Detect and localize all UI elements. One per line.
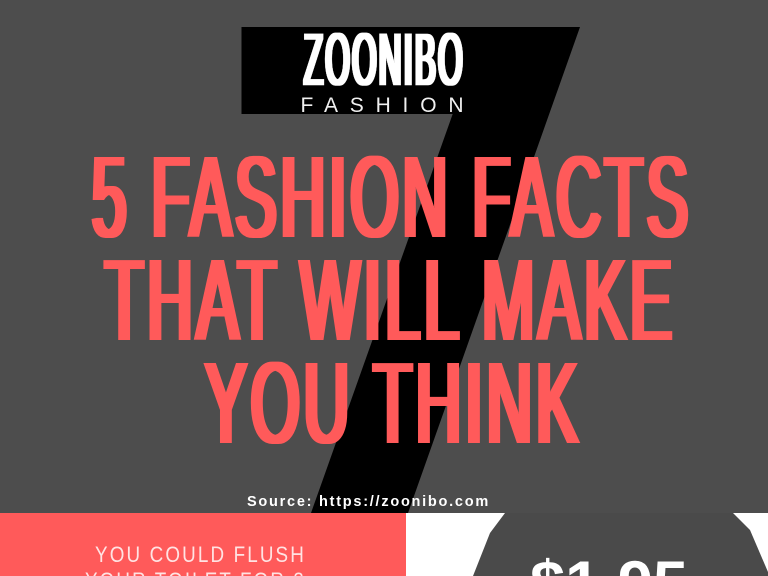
panel: t-shirt price [406,513,768,576]
source line: Source: https://zoonibo.com [247,493,490,510]
panel background [0,513,406,576]
graphic: large black seven [242,27,580,513]
panel background [406,513,768,576]
fact text line 1: YOU COULD FLUSH [95,542,306,567]
infographic: ZOONIBO [304,18,465,101]
panel: fact one text [0,513,406,576]
title [92,132,692,468]
logo [300,18,465,117]
logo: subtitle: FASHION [300,94,464,117]
icon: grey t-shirt [473,513,768,576]
